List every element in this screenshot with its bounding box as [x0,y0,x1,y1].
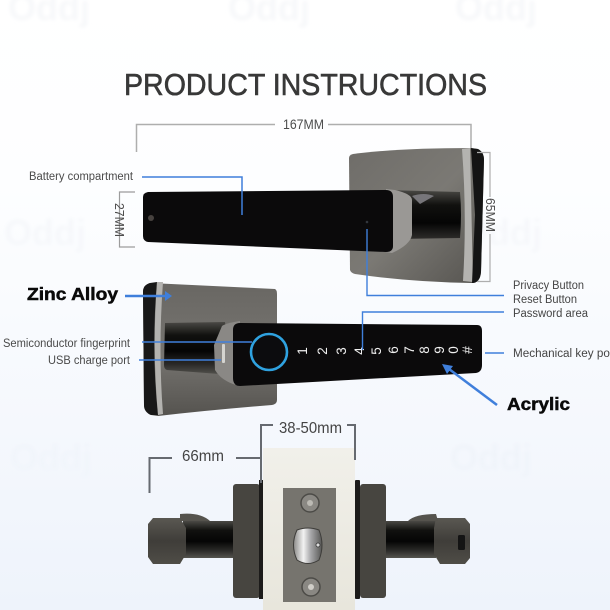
dimension: 65MM height: 65MM [483,198,498,232]
keypad digits [295,346,475,355]
USB port slot [222,344,225,363]
reset pin hole [366,221,368,223]
label: acrylic with arrow [442,364,570,414]
dimension: 66mm [150,448,260,493]
dimension: 65MM height [477,152,498,282]
keypad digits: # [460,346,475,354]
label: battery compartment [29,171,242,215]
dimension: 167MM width [136,117,471,152]
label: acrylic with arrow: Acrylic [507,394,570,414]
left handle top ridge [180,514,210,521]
keypad digits: 6 [386,346,401,354]
chrome latch [294,528,322,564]
keypad digits: 3 [334,347,349,355]
faint watermarks: Oddj [460,212,542,253]
label: privacy button: Privacy Button [513,280,584,292]
top handle, side view [143,148,484,283]
bottom screw [302,578,320,596]
lock faceplate [283,488,336,602]
plate edge highlight [462,148,473,282]
dimension: 27MM lever height: 27MM [112,203,126,237]
dimension: 27MM lever height [112,192,135,247]
faint watermarks [4,0,542,478]
collar [214,321,240,386]
dimension: 38-50mm [261,420,355,483]
faint watermarks: Oddj [4,212,86,253]
lever with keypad [233,323,482,386]
label: password area with leader [362,308,589,350]
right USB slot [458,535,465,550]
label: reset button with leader: Reset Button [513,294,577,306]
faint watermarks: Oddj [10,437,92,478]
right mounting block [360,484,386,598]
label: reset button with leader [367,229,577,306]
door cross-section with lock, top view [148,448,470,610]
keypad digits: 9 [432,346,447,354]
neck [164,322,232,375]
rose plate [143,283,277,416]
right handle head [434,518,470,564]
neck [384,190,461,250]
dimension: 38-50mm: 38-50mm [279,420,342,437]
keypad digits: 7 [402,346,417,354]
keypad digits: 0 [446,346,461,354]
latch pin [316,543,320,547]
bottom handle, front view [143,282,482,416]
keypad digits: 8 [417,346,432,354]
right handle top ridge [408,514,438,521]
title: PRODUCT INSTRUCTIONS [124,67,487,102]
left mounting block [233,484,260,598]
left handle head [148,518,186,564]
label: zinc alloy with arrow: Zinc Alloy [27,284,118,304]
lever [143,190,393,252]
label: password area with leader: Password area [513,308,589,320]
plate left dark edge [143,282,158,415]
keypad digits: 1 [295,347,310,355]
rose plate [349,148,484,283]
right black plate [355,480,360,599]
fingerprint sensor ring [251,334,287,370]
door slab [263,448,355,610]
keypad digits: 4 [352,347,367,355]
top screw [301,494,319,512]
label: semiconductor fingerprint: Semiconductor fingerprint [3,338,131,350]
dimension: 66mm: 66mm [182,448,224,465]
key cylinder hole [148,215,154,221]
left handle neck [183,521,233,558]
neck glare [412,194,434,204]
plate left highlight [155,282,163,415]
label: battery compartment: Battery compartment [29,171,134,183]
faint watermarks: Oddj [450,437,532,478]
label: zinc alloy with arrow [27,284,172,304]
dimension: 167MM width: 167MM [283,117,324,132]
keypad digits: 5 [369,347,384,355]
label: USB charge port: USB charge port [48,355,131,367]
left black plate [259,480,263,599]
keypad digits: 2 [315,347,330,355]
collar [385,189,412,253]
right handle neck [386,521,436,558]
plate dark edge [471,148,484,283]
